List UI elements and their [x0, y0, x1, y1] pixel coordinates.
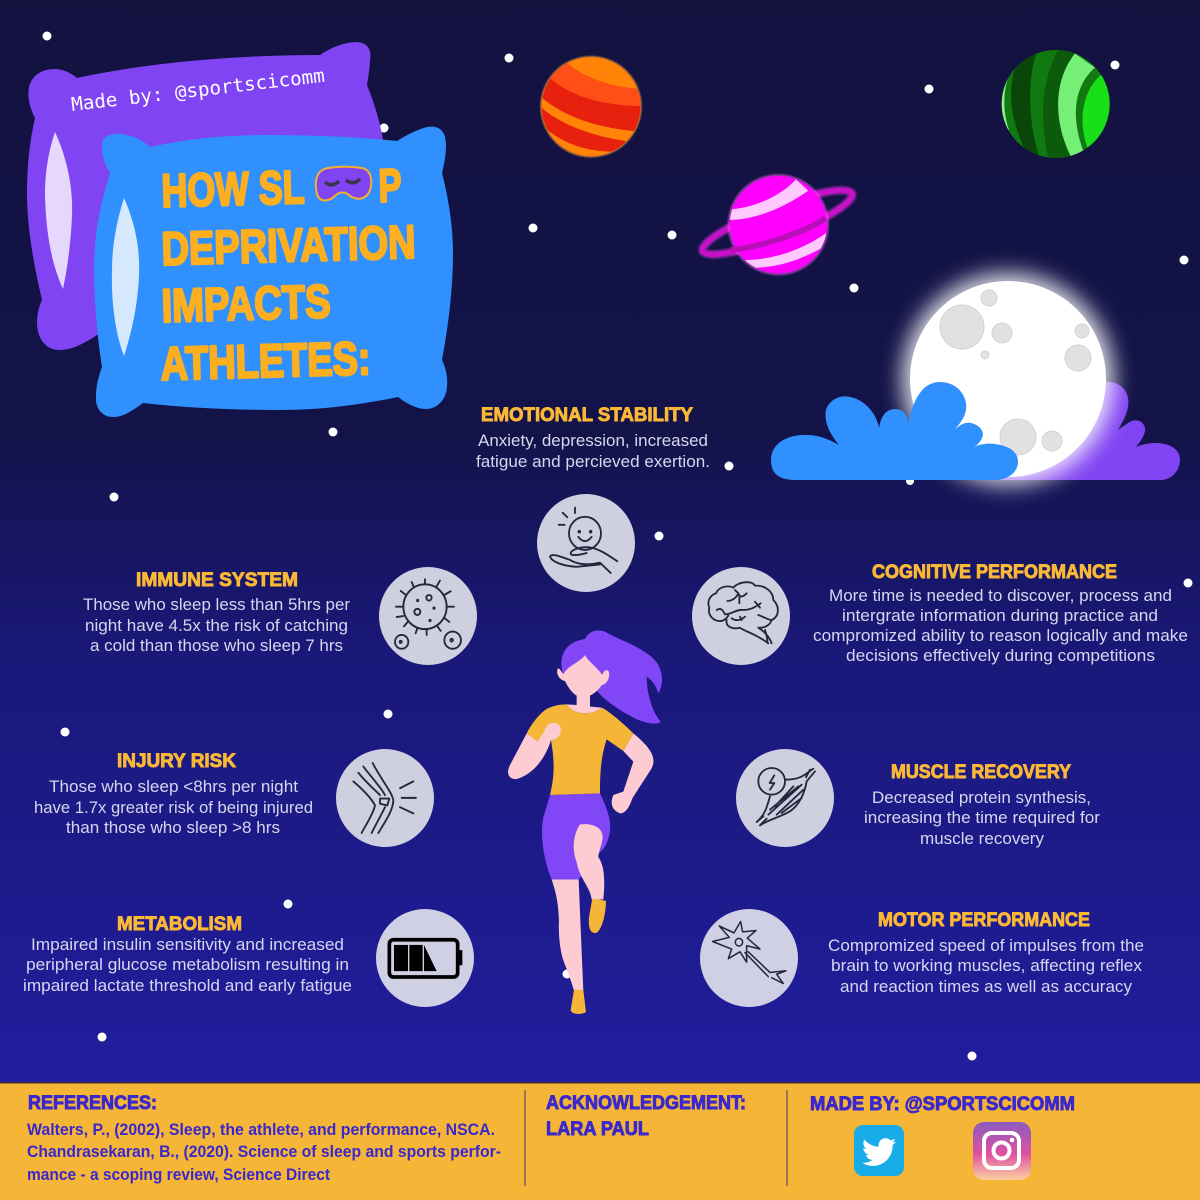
moon: [902, 273, 1114, 485]
planet: orange: [539, 55, 643, 158]
icon: twitter: [854, 1125, 904, 1176]
upper body: [508, 630, 662, 813]
title: P: [378, 158, 402, 212]
panel: emotional stability: EMOTIONAL STABILITY: [481, 404, 693, 426]
standing leg: [552, 880, 583, 990]
icon: brain: [708, 582, 778, 643]
planet: green: [1002, 50, 1110, 158]
panel: cognitive performance: compromized ability to reason logically and make: [813, 627, 1188, 645]
panel: muscle recovery: MUSCLE RECOVERY: [891, 761, 1071, 783]
panel: injury risk: than those who sleep >8 hrs: [66, 819, 280, 837]
acknowledgement: LARA PAUL: [546, 1118, 649, 1140]
icon: smile in hand: [550, 508, 617, 573]
blue cloud: [771, 382, 1018, 480]
panel: injury risk: INJURY RISK: [117, 750, 236, 772]
panel: metabolism: impaired lactate threshold and early fatigue: [23, 977, 352, 995]
panel: metabolism: Impaired insulin sensitivity and increased: [31, 936, 344, 954]
head and neck: [557, 655, 609, 708]
icon: sleep mask: [316, 166, 371, 200]
panel: immune system: night have 4.5x the risk of catching: [85, 617, 348, 635]
footer bar: [0, 1082, 1200, 1200]
planet: pink ringed: [697, 174, 857, 275]
raised leg: [574, 824, 604, 899]
icon: instagram: [973, 1122, 1031, 1180]
left arm: [508, 723, 561, 779]
acknowledgement: [546, 1092, 746, 1140]
panel: emotional stability: [476, 404, 710, 592]
panel: immune system: [83, 567, 477, 665]
panel: motor performance: [700, 909, 1144, 1007]
panel: metabolism: [23, 909, 474, 1007]
purple cloud: [1000, 382, 1180, 480]
panel: immune system: a cold than those who sleep 7 hrs: [90, 637, 343, 655]
panel: metabolism: peripheral glucose metabolism resulting in: [26, 956, 349, 974]
panel: injury risk: Those who sleep <8hrs per night: [49, 778, 298, 796]
panel: muscle recovery: [736, 749, 1101, 848]
title: IMPACTS: [161, 274, 331, 332]
panel: cognitive performance: COGNITIVE PERFORMANCE: [872, 561, 1117, 583]
runner figure: [508, 630, 662, 1014]
panel: injury risk: have 1.7x greater risk of being injured: [34, 799, 313, 817]
lower body: [542, 793, 610, 1014]
panel: motor performance: brain to working muscles, affecting reflex: [831, 957, 1143, 975]
panel: metabolism: METABOLISM: [117, 913, 242, 935]
icon: knee: [353, 763, 416, 833]
panel: motor performance: and reaction times as well as accuracy: [840, 978, 1133, 996]
moon with clouds: [771, 273, 1180, 485]
shoes: [571, 898, 606, 1014]
panel: motor performance: MOTOR PERFORMANCE: [878, 909, 1090, 931]
acknowledgement: ACKNOWLEDGEMENT:: [546, 1092, 746, 1114]
panel: immune system: Those who sleep less than 5hrs per: [83, 596, 351, 614]
panel: emotional stability: Anxiety, depression, increased: [478, 432, 708, 450]
icon: low battery: [389, 940, 462, 977]
title: HOW SL: [161, 160, 305, 217]
references: Walters, P., (2002), Sleep, the athlete, and performance, NSCA.: [27, 1121, 495, 1139]
icon: virus: [395, 579, 461, 649]
panel: immune system: IMMUNE SYSTEM: [136, 569, 298, 591]
icon: muscle with bolt: [757, 768, 815, 825]
panel: cognitive performance: [692, 561, 1188, 665]
panel: injury risk: [34, 749, 434, 847]
panel: muscle recovery: increasing the time required for: [864, 809, 1101, 827]
purple pillow: [27, 42, 384, 350]
references: REFERENCES:: [28, 1092, 157, 1114]
icon: neuron: [713, 922, 786, 984]
panel: muscle recovery: muscle recovery: [920, 830, 1045, 848]
blue pillow: [94, 127, 453, 417]
panel: motor performance: Compromized speed of impulses from the: [828, 937, 1144, 955]
shirt: [527, 704, 633, 795]
panel: emotional stability: fatigue and percieved exertion.: [476, 453, 710, 471]
hair: [561, 630, 662, 724]
references: mance - a scoping review, Science Direct: [27, 1166, 330, 1184]
collar: [567, 704, 602, 713]
shorts: [542, 793, 610, 880]
title: ATHLETES:: [160, 331, 371, 390]
right arm: [612, 733, 653, 813]
title: [160, 158, 416, 390]
references: Chandrasekaran, B., (2020). Science of sleep and sports perfor-: [27, 1143, 501, 1161]
panel: cognitive performance: decisions effectively during competitions: [846, 647, 1155, 665]
title: DEPRIVATION: [161, 215, 416, 275]
panel: cognitive performance: intergrate information during practice and: [842, 607, 1158, 625]
references: [27, 1092, 501, 1184]
panel: muscle recovery: Decreased protein synthesis,: [872, 789, 1091, 807]
made by: MADE BY: @SPORTSCICOMM: [810, 1093, 1075, 1115]
credit line: Made by: @sportscicomm: [70, 65, 326, 116]
panel: cognitive performance: More time is needed to discover, process and: [829, 587, 1172, 605]
